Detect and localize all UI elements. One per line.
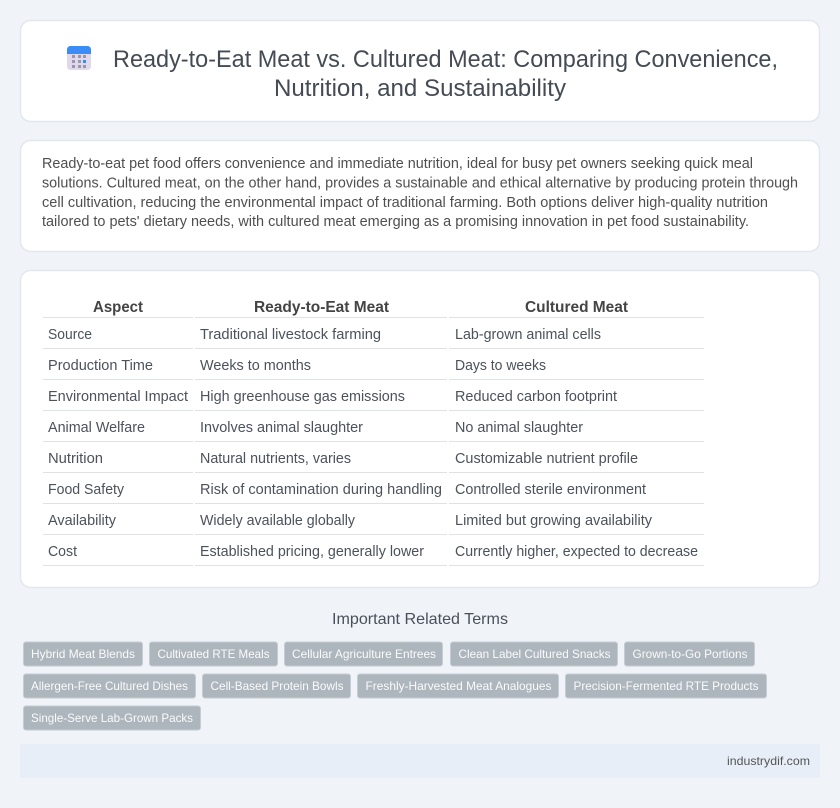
row: nutrition: Customizable nutrient profile (455, 451, 638, 467)
text block: introduction paragraph: tailored to pets' dietary needs, with cultured meat emerging as a promising innovation in pet food sustainability. (42, 214, 749, 230)
row: cost: Cost (48, 544, 77, 560)
row: production time: Weeks to months (200, 358, 311, 374)
tag: Grown-to-Go Portions (632, 647, 748, 661)
row: availability: Limited but growing availability (455, 513, 653, 529)
row: availability (48, 513, 653, 529)
tag: Hybrid Meat Blends (31, 647, 135, 661)
text block: introduction paragraph: cell cultivation, reducing the environmental impact of traditional farming. Both options deliver high-quality nutrition (42, 195, 768, 211)
table row lines (43, 317, 704, 566)
text block: introduction paragraph: Ready-to-eat pet food offers convenience and immediate nutrition, ideal for busy pet owners seeking quick meal (42, 156, 753, 172)
row: production time (48, 358, 546, 374)
row: food safety: Food Safety (48, 482, 125, 498)
row: source: Source (48, 327, 92, 343)
heading: important related terms: Important Related Terms (332, 611, 508, 628)
row: environmental impact: High greenhouse gas emissions (200, 389, 405, 405)
row: cost (48, 544, 698, 560)
tags: related terms (24, 642, 766, 730)
row: nutrition: Nutrition (48, 451, 103, 467)
tag: Clean Label Cultured Snacks (458, 647, 610, 661)
tag (358, 674, 558, 698)
title: Nutrition, and Sustainability (274, 75, 566, 102)
row: environmental impact: Environmental Impact (48, 389, 188, 405)
row: source: Lab-grown animal cells (455, 327, 601, 343)
row: animal welfare: Involves animal slaughter (200, 420, 363, 436)
title: Ready-to-Eat Meat vs. Cultured Meat: Comparing Convenience, (113, 46, 778, 73)
row: food safety: Controlled sterile environment (455, 482, 646, 498)
tag: Single-Serve Lab-Grown Packs (31, 711, 193, 725)
tag (202, 674, 350, 698)
tag: Freshly-Harvested Meat Analogues (366, 679, 552, 693)
title (113, 46, 778, 102)
icon: calendar (67, 46, 91, 70)
row: source (48, 327, 601, 343)
tag (450, 642, 618, 666)
row: environmental impact (48, 389, 617, 405)
tag: Cellular Agriculture Entrees (292, 647, 436, 661)
tag (24, 642, 142, 666)
footer (20, 744, 820, 778)
row: food safety: Risk of contamination during handling (200, 482, 442, 498)
tag (24, 706, 200, 730)
tag (24, 674, 196, 698)
tag (624, 642, 754, 666)
tag (284, 642, 442, 666)
row: food safety (48, 482, 646, 498)
row: production time: Production Time (48, 358, 153, 374)
row: cost: Established pricing, generally lower (200, 544, 424, 560)
table header: Ready-to-Eat Meat (254, 299, 390, 316)
tag (150, 642, 278, 666)
row: availability: Widely available globally (200, 513, 356, 529)
table header: Cultured Meat (525, 299, 629, 316)
tag: Precision-Fermented RTE Products (574, 679, 758, 693)
tag: Cell-Based Protein Bowls (210, 679, 344, 693)
tag: Cultivated RTE Meals (158, 647, 270, 661)
row: animal welfare (48, 420, 583, 436)
row: availability: Availability (48, 513, 117, 529)
row: environmental impact: Reduced carbon footprint (455, 389, 617, 405)
table header: Aspect (93, 299, 144, 316)
row: production time: Days to weeks (455, 358, 546, 374)
row: animal welfare: Animal Welfare (48, 420, 145, 436)
table header (93, 299, 629, 316)
row: nutrition (48, 451, 638, 467)
footer: industrydif.com (727, 754, 810, 768)
row: animal welfare: No animal slaughter (455, 420, 583, 436)
panel: comparison table (20, 270, 820, 588)
row: nutrition: Natural nutrients, varies (200, 451, 351, 467)
row: source: Traditional livestock farming (200, 327, 381, 343)
row: cost: Currently higher, expected to decrease (455, 544, 698, 560)
tag (566, 674, 766, 698)
panel: title card (20, 20, 820, 122)
panel: introduction (20, 140, 820, 252)
text block: introduction paragraph (42, 156, 798, 230)
text block: introduction paragraph: solutions. Cultured meat, on the other hand, provides a sustainable and ethical alternative by producing protein through (42, 176, 798, 192)
tag: Allergen-Free Cultured Dishes (31, 679, 188, 693)
